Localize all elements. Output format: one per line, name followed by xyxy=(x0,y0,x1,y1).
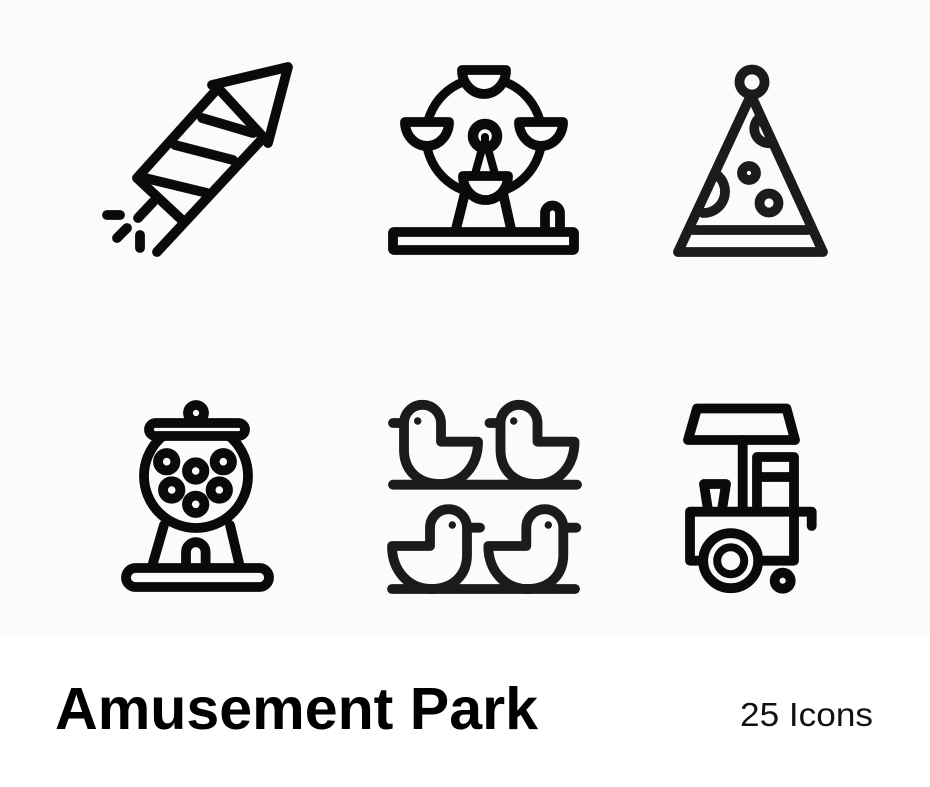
icon: party hat xyxy=(678,70,823,252)
icon: ferris wheel xyxy=(393,70,574,250)
icon: duck carousel xyxy=(392,405,577,589)
icon: gumball machine xyxy=(126,405,269,587)
icon count label: 25 Icons xyxy=(740,696,873,733)
title: Amusement Park xyxy=(55,676,538,742)
duck: bottom right xyxy=(488,509,576,589)
duck: top left xyxy=(393,405,478,484)
icon: food cart xyxy=(688,408,812,589)
duck: top right xyxy=(490,405,574,484)
duck: bottom left xyxy=(392,509,480,589)
icon: firework rocket xyxy=(107,67,288,252)
